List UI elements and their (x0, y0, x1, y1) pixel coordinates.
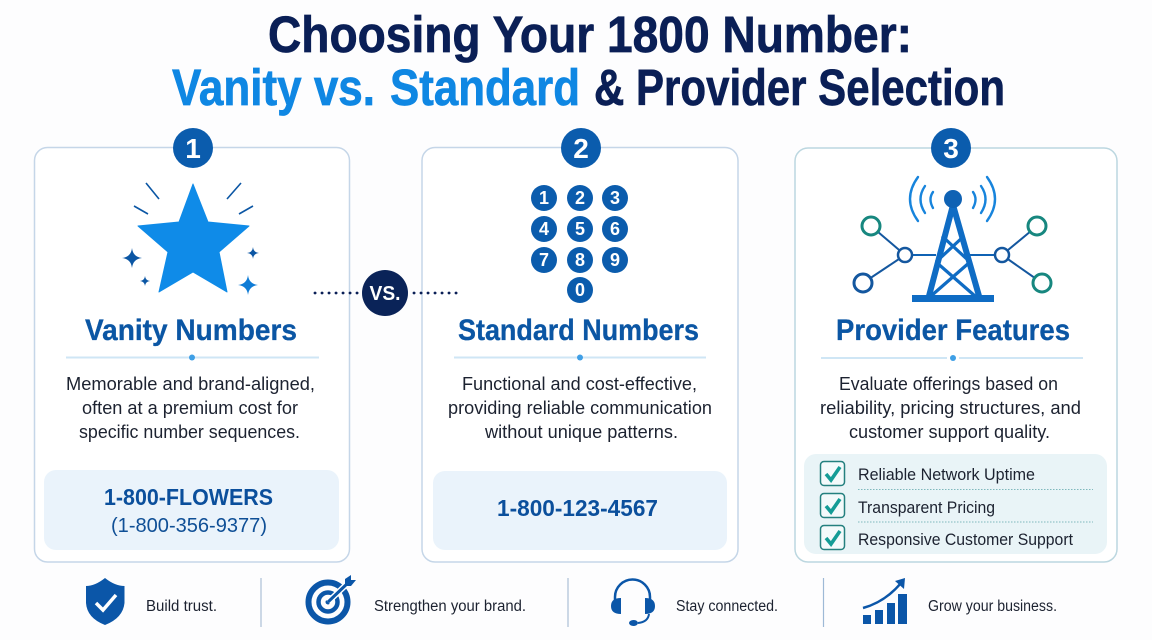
text: standard description: without unique patterns. (484, 421, 678, 442)
check item: support: Responsive Customer Support (858, 530, 1073, 549)
vs. connector (315, 270, 460, 316)
check item: support (820, 526, 1073, 550)
benefit: grow your business: Grow your business. (928, 598, 1057, 615)
title: Choosing Your 1800 Number: (268, 6, 912, 63)
benefit: build trust (86, 578, 217, 625)
check item: uptime (820, 462, 1035, 486)
check item: uptime: Reliable Network Uptime (858, 465, 1035, 484)
panel: vanity numbers (34, 128, 350, 562)
callout: vanity example: (1-800-356-9377) (111, 515, 267, 537)
text: provider description: Evaluate offerings based on (839, 373, 1058, 394)
icon: keypad: 0 (575, 280, 585, 300)
callout: standard example (433, 471, 727, 550)
check item: pricing: Transparent Pricing (858, 498, 995, 517)
panel: standard numbers (422, 128, 738, 562)
divider (454, 354, 706, 360)
badge 3 (931, 128, 971, 168)
callout: vanity example: 1-800-FLOWERS (104, 484, 273, 510)
icon: keypad: 8 (575, 250, 585, 270)
text: provider description (820, 373, 1081, 442)
text: provider description: customer support quality. (849, 421, 1050, 442)
badge 2: 2 (573, 133, 589, 164)
text: vanity description (66, 373, 315, 442)
check item: pricing (820, 494, 995, 518)
divider (821, 355, 1083, 361)
icon: keypad: 6 (610, 219, 620, 239)
icon: keypad: 3 (610, 188, 620, 208)
benefit: strengthen your brand (308, 575, 526, 622)
icon: star with sparkles (122, 183, 259, 295)
badge 2 (561, 128, 601, 168)
badge 1: 1 (185, 133, 201, 164)
benefit: stay connected (611, 580, 778, 626)
text: standard description: providing reliable communication (448, 397, 712, 418)
benefit: stay connected: Stay connected. (676, 598, 778, 615)
heading: vanity numbers: Vanity Numbers (85, 314, 297, 347)
benefit: grow your business (863, 578, 1057, 624)
heading: provider features: Provider Features (836, 314, 1070, 347)
icon: keypad: 9 (610, 250, 620, 270)
icon: network tower (854, 177, 1051, 302)
divider (66, 354, 319, 360)
panel: provider features (795, 128, 1117, 562)
title: Vanity vs. (172, 59, 375, 116)
icon: keypad: 1 (539, 188, 549, 208)
icon: keypad (531, 185, 628, 303)
icon: keypad: 4 (539, 219, 549, 239)
vs. connector: VS. (370, 283, 400, 305)
title (172, 6, 1005, 116)
title: Standard (390, 59, 580, 116)
checklist (804, 454, 1107, 554)
title: & Provider Selection (594, 59, 1005, 116)
heading: standard numbers: Standard Numbers (458, 314, 699, 347)
badge 3: 3 (943, 133, 959, 164)
badge 1 (173, 128, 213, 168)
icon: keypad: 2 (575, 188, 585, 208)
text: standard description (448, 373, 712, 442)
callout: standard example: 1-800-123-4567 (497, 495, 658, 521)
benefit: build trust: Build trust. (146, 598, 217, 615)
footer: benefits row (86, 575, 1057, 627)
callout: vanity example (44, 470, 339, 550)
text: standard description: Functional and cost-effective, (462, 373, 697, 394)
benefit: strengthen your brand: Strengthen your brand. (374, 598, 526, 615)
text: vanity description: often at a premium cost for (82, 397, 298, 418)
text: vanity description: specific number sequences. (79, 421, 300, 442)
icon: keypad: 5 (575, 219, 585, 239)
text: provider description: reliability, pricing structures, and (820, 397, 1081, 418)
text: vanity description: Memorable and brand-aligned, (66, 373, 315, 394)
icon: keypad: 7 (539, 250, 549, 270)
